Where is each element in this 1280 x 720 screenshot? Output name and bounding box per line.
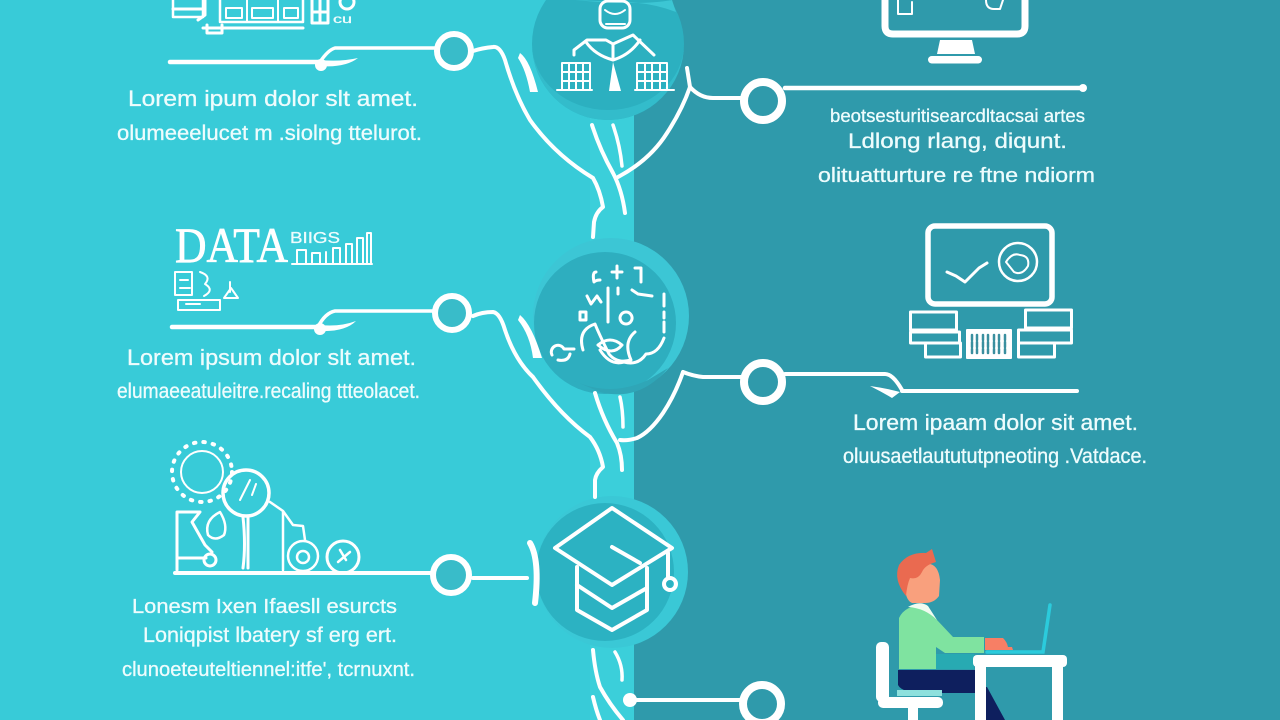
text: left row 2: Lorem ipsum dolor slt amet. (127, 345, 416, 370)
connector lines: bottom branches (473, 543, 741, 720)
text: left row 1 (117, 86, 422, 145)
icon: DATA heading and bars (175, 217, 372, 310)
central node: graduation cap (536, 496, 688, 648)
icon: DATA heading and bars: BIIGS (290, 230, 340, 247)
text: left row 2: elumaeeatuleitre.recaling ttteolacet. (117, 380, 420, 403)
right row 1: ring and line (744, 82, 1087, 120)
text: right row 2: oluusaetlautututpneoting .Vatdace. (843, 445, 1147, 468)
text: left row 2 (117, 345, 420, 403)
icon label: top left: cu (333, 12, 352, 26)
text: left row 3: Loniqpist lbatery sf erg ert. (143, 624, 397, 647)
connector dot: bottom (623, 693, 637, 707)
chair (876, 642, 943, 720)
text: left row 3: clunoeteuteltiennel:itfe', tcrnuxnt. (122, 659, 415, 681)
left row 3: line and ring (175, 557, 469, 593)
seat highlight (897, 690, 942, 696)
text: right row 2 (843, 410, 1147, 468)
text: right row 2: Lorem ipaam dolor sit amet. (853, 410, 1138, 435)
right row 2: ring and line (744, 363, 1077, 401)
text: right row 1: beotsesturitisearcdltacsai artes (830, 106, 1085, 126)
legs (898, 670, 1005, 720)
icon: magnifier, sun and fruit (172, 442, 359, 573)
text: right row 1: Ldlong rlang, diqunt. (848, 130, 1067, 153)
connector lines: middle branches (473, 312, 743, 497)
icon: monitor top right (885, 0, 1025, 64)
icon: DATA heading and bars: DATA (175, 217, 288, 273)
text: left row 1: olumeeelucet m .siolng ttelurot. (117, 122, 422, 145)
hand (985, 638, 1013, 650)
right row 3: ring (743, 685, 781, 720)
left row 1: line and ring (170, 34, 471, 71)
laptop (987, 605, 1050, 652)
collar (908, 603, 937, 620)
text: left row 3: Lonesm Ixen Ifaesll esurcts (132, 596, 397, 618)
central node: organisation (532, 0, 684, 120)
seat gap (936, 654, 974, 669)
illustration: person at desk (876, 549, 1067, 720)
left row 2: line and ring (172, 296, 469, 335)
head (905, 564, 940, 603)
text: right row 1 (818, 106, 1095, 187)
connector lines: top branches (473, 47, 743, 237)
connector blob: middle (518, 315, 542, 358)
icon: dashboard monitor and panels (910, 226, 1072, 358)
hair (897, 549, 936, 596)
text: left row 1: Lorem ipum dolor slt amet. (128, 86, 418, 111)
shirt (899, 605, 984, 669)
central node: data flow (533, 238, 689, 394)
text: left row 3 (122, 596, 415, 681)
desk (973, 655, 1067, 720)
connector blob: top (518, 53, 538, 92)
text: right row 1: olituatturture re ftne ndiorm (818, 165, 1095, 187)
icon: machines top left (173, 0, 354, 33)
